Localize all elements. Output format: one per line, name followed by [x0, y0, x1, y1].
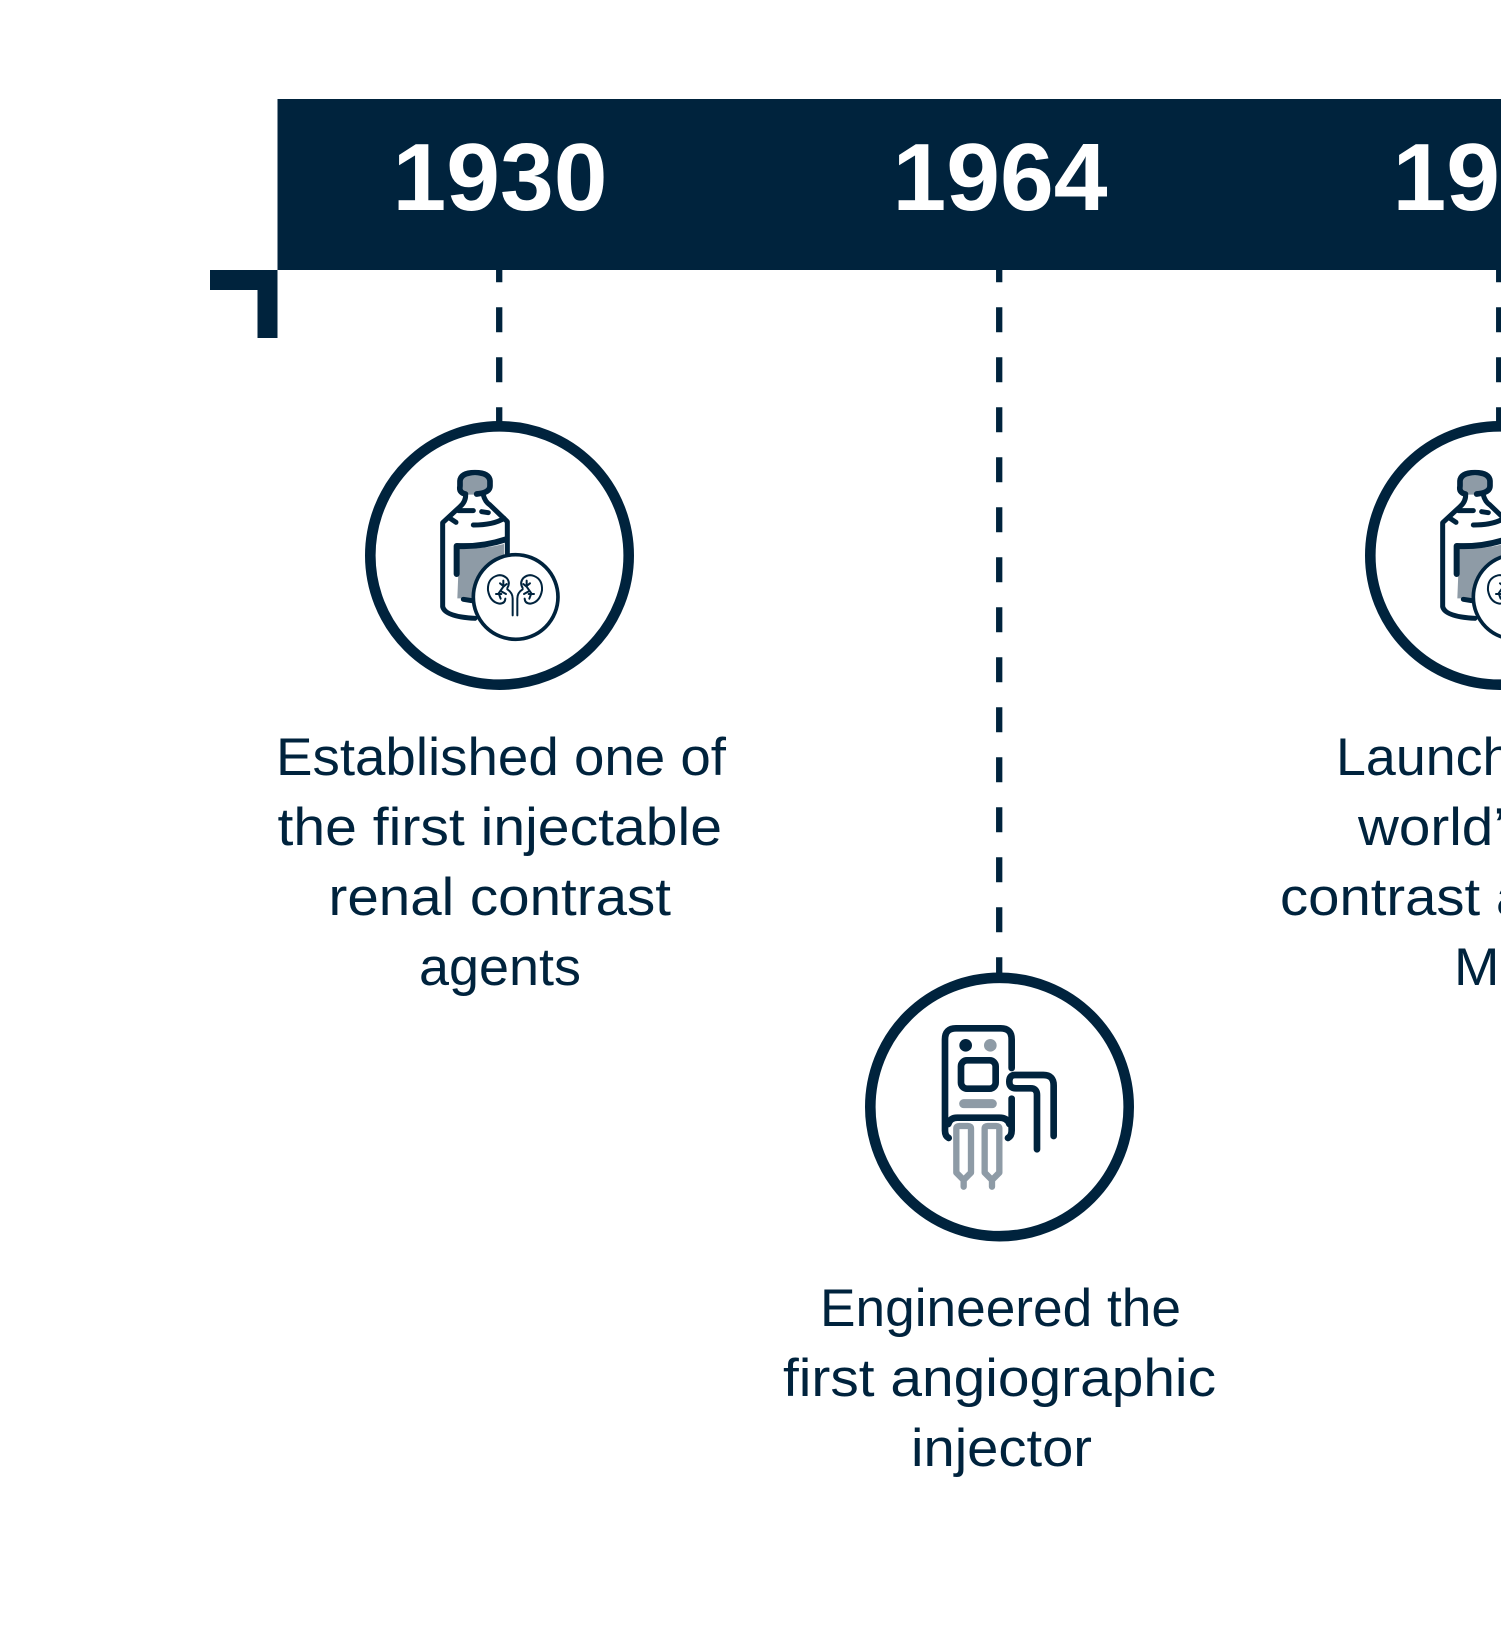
dashed connector: 1964: [996, 270, 1002, 976]
milestone text: renal contrast agents: Established one of: [276, 728, 726, 787]
year: 1964: 1964: [892, 124, 1108, 231]
milestone text: first angiographic injector: first angiographic: [783, 1349, 1216, 1408]
milestone icon circle: MRI contrast agent (cropped): [1370, 426, 1501, 685]
milestone icon circle: contrast agent vial and kidneys: [370, 426, 629, 685]
milestone text: renal contrast agents: agents: [419, 938, 581, 997]
milestone text: renal contrast agents: renal contrast: [328, 868, 671, 927]
year: 1930: 1930: [392, 124, 608, 231]
milestone icon circle: angiographic injector: [870, 978, 1129, 1236]
milestone text: first angiographic injector: injector: [911, 1419, 1092, 1478]
corner fold of header bar: [210, 270, 278, 338]
icon: injector: [945, 1028, 1054, 1187]
milestone text: renal contrast agents: [276, 728, 726, 997]
icon: kidneys: [488, 575, 542, 615]
icon: vial with badge: [1443, 473, 1501, 639]
milestone text: renal contrast agents: the first injectable: [278, 798, 722, 857]
timeline header bar: [278, 99, 1501, 270]
milestone text: first angiographic injector: Engineered the: [820, 1279, 1181, 1338]
dashed connector: 1930: [496, 270, 502, 424]
dashed connector: third milestone: [1496, 270, 1501, 424]
milestone text: first angiographic injector: [783, 1279, 1216, 1478]
milestone text: MRI contrast agent (cropped): [1280, 728, 1501, 997]
icon: vial with kidney badge: [443, 473, 558, 639]
